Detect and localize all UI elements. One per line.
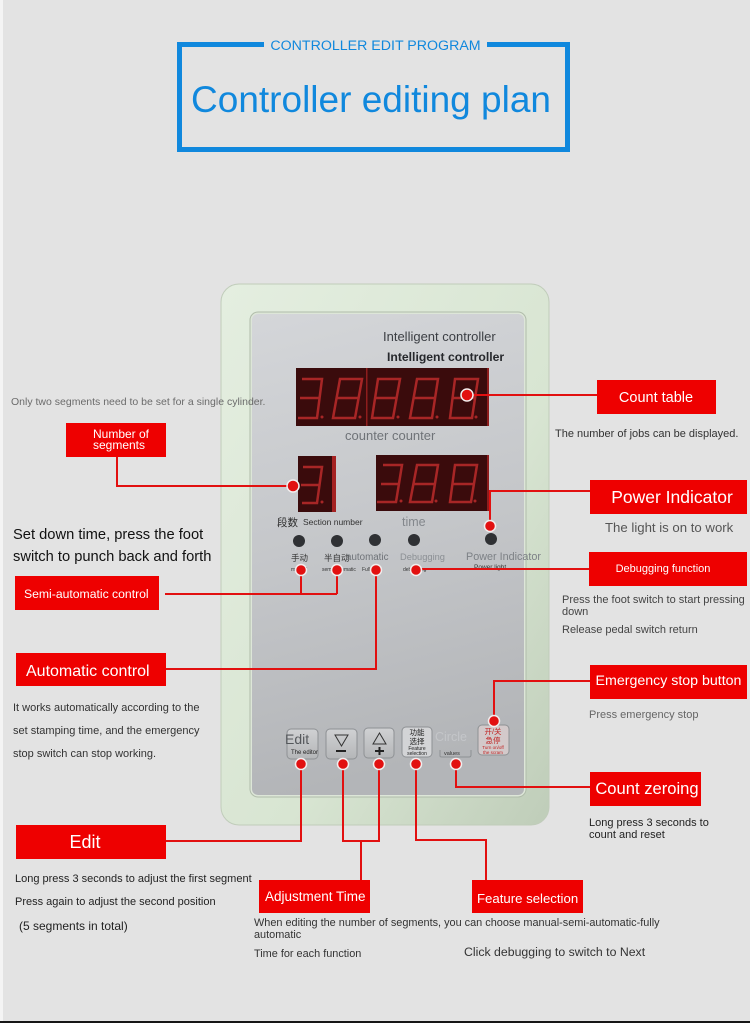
label: number of segments: Number of (93, 427, 150, 441)
note: set down time: switch to punch back and forth (13, 549, 211, 565)
title frame (180, 38, 568, 150)
note: edit: (5 segments in total) (19, 919, 128, 933)
note: count zeroing: count and reset (589, 829, 665, 841)
counter display (296, 368, 489, 426)
label: automatic control: Automatic control (26, 663, 150, 680)
circle reset button (435, 730, 471, 757)
section number label (277, 516, 363, 529)
time label: time (402, 515, 426, 529)
note: edit: Long press 3 seconds to adjust the first segment (15, 873, 252, 885)
note: edit (15, 873, 252, 933)
note: automatic (13, 702, 200, 760)
emergency stop button (478, 725, 509, 755)
subtitle: CONTROLLER EDIT PROGRAM (270, 38, 481, 54)
label: emergency stop button (590, 665, 747, 699)
note: automatic: It works automatically according to the (13, 702, 199, 714)
note: adjustment: Time for each function (254, 948, 361, 960)
label: edit (16, 825, 166, 859)
label: edit: Edit (69, 832, 101, 852)
note: set down time: Set down time, press the foot (13, 527, 203, 543)
feature selection button: 功能 (410, 727, 425, 737)
plus button (364, 728, 394, 758)
edit button (285, 729, 318, 759)
edit button: The editor (291, 750, 318, 756)
section number display (298, 456, 336, 512)
indicator labels: 半自动 (324, 553, 350, 563)
note: automatic: set stamping time, and the emergency (13, 725, 200, 737)
note: debugging: Release pedal switch return (562, 624, 698, 636)
edit button: Edit (285, 731, 309, 747)
label: semi-automatic control: Semi-automatic control (24, 587, 149, 601)
time display (376, 455, 489, 511)
label: count zeroing (590, 772, 701, 806)
connector lines (117, 395, 597, 880)
indicator labels: semi-automatic (322, 567, 356, 573)
controller device (221, 284, 549, 825)
emergency stop button: Turn on/off (482, 745, 505, 750)
feature selection button: Feature (408, 746, 426, 752)
circle reset button: Circle (435, 730, 467, 744)
note: emergency: Press emergency stop (589, 709, 698, 721)
device heading: Intelligent controller (383, 329, 496, 344)
label: adjustment time: Adjustment Time (265, 889, 366, 904)
emergency stop button: 急停 (486, 735, 501, 745)
label: emergency stop button: Emergency stop button (596, 673, 741, 689)
note: debugging (562, 594, 745, 636)
connector dots (287, 389, 500, 770)
feature selection button (402, 727, 432, 757)
circle reset button: values (444, 751, 460, 757)
indicator labels: Full-auto (362, 567, 382, 573)
counter label: counter counter (345, 428, 436, 443)
note: count zeroing: Long press 3 seconds to (589, 817, 709, 829)
note: adjustment (254, 917, 660, 960)
label: feature selection: Feature selection (477, 891, 578, 906)
label: automatic control (16, 653, 166, 686)
note: count table: The number of jobs can be displayed. (555, 428, 738, 440)
label: semi-automatic control (15, 576, 159, 610)
label: count table (597, 380, 716, 414)
feature selection button: 选择 (410, 736, 425, 746)
device heading: Intelligent controller (387, 350, 504, 364)
label: count table: Count table (619, 390, 693, 406)
feature selection button: selection (407, 751, 427, 757)
label: number of segments: segments (93, 438, 145, 452)
indicator labels: Power Indicator (466, 551, 541, 563)
note: adjustment: automatic (254, 929, 302, 941)
note: debugging switch: Click debugging to switch to Next (464, 945, 646, 959)
note: count zeroing (589, 817, 709, 841)
note: automatic: stop switch can stop working. (13, 748, 156, 760)
label: debugging function: Debugging function (616, 563, 710, 575)
emergency stop button: the scram (483, 750, 503, 755)
label: power indicator (590, 480, 747, 514)
note: debugging: Press the foot switch to start pressing (562, 594, 745, 606)
label: count zeroing: Count zeroing (595, 779, 699, 798)
indicator labels (291, 551, 541, 573)
minus button (326, 729, 357, 759)
note: edit: Press again to adjust the second position (15, 896, 216, 908)
note: adjustment: When editing the number of segments, you can choose manual-semi-automatic-fully (254, 917, 660, 929)
indicator labels: Debugging (400, 552, 445, 562)
indicator labels: 手动 (291, 553, 309, 563)
section number label: 段数 (277, 516, 298, 529)
note: single cylinder: Only two segments need to be set for a single cylinder. (11, 396, 265, 408)
label: power indicator: Power Indicator (611, 487, 733, 507)
emergency stop button: 开/关 (484, 726, 502, 736)
indicator labels: debugging (403, 567, 427, 573)
label: feature selection (472, 880, 583, 913)
note: debugging: down (562, 606, 588, 618)
note: power: The light is on to work (605, 520, 734, 535)
section number label: Section number (303, 517, 363, 527)
indicator labels: Power light (474, 564, 506, 571)
indicator lights (293, 533, 497, 547)
note: set down time (13, 527, 211, 565)
label: debugging function (589, 552, 747, 586)
label: adjustment time (259, 880, 370, 913)
device heading (383, 329, 504, 364)
title: Controller editing plan (191, 79, 551, 120)
indicator labels: automatic (346, 552, 389, 563)
label: number of segments (66, 423, 166, 457)
indicator labels: manual (291, 567, 307, 573)
